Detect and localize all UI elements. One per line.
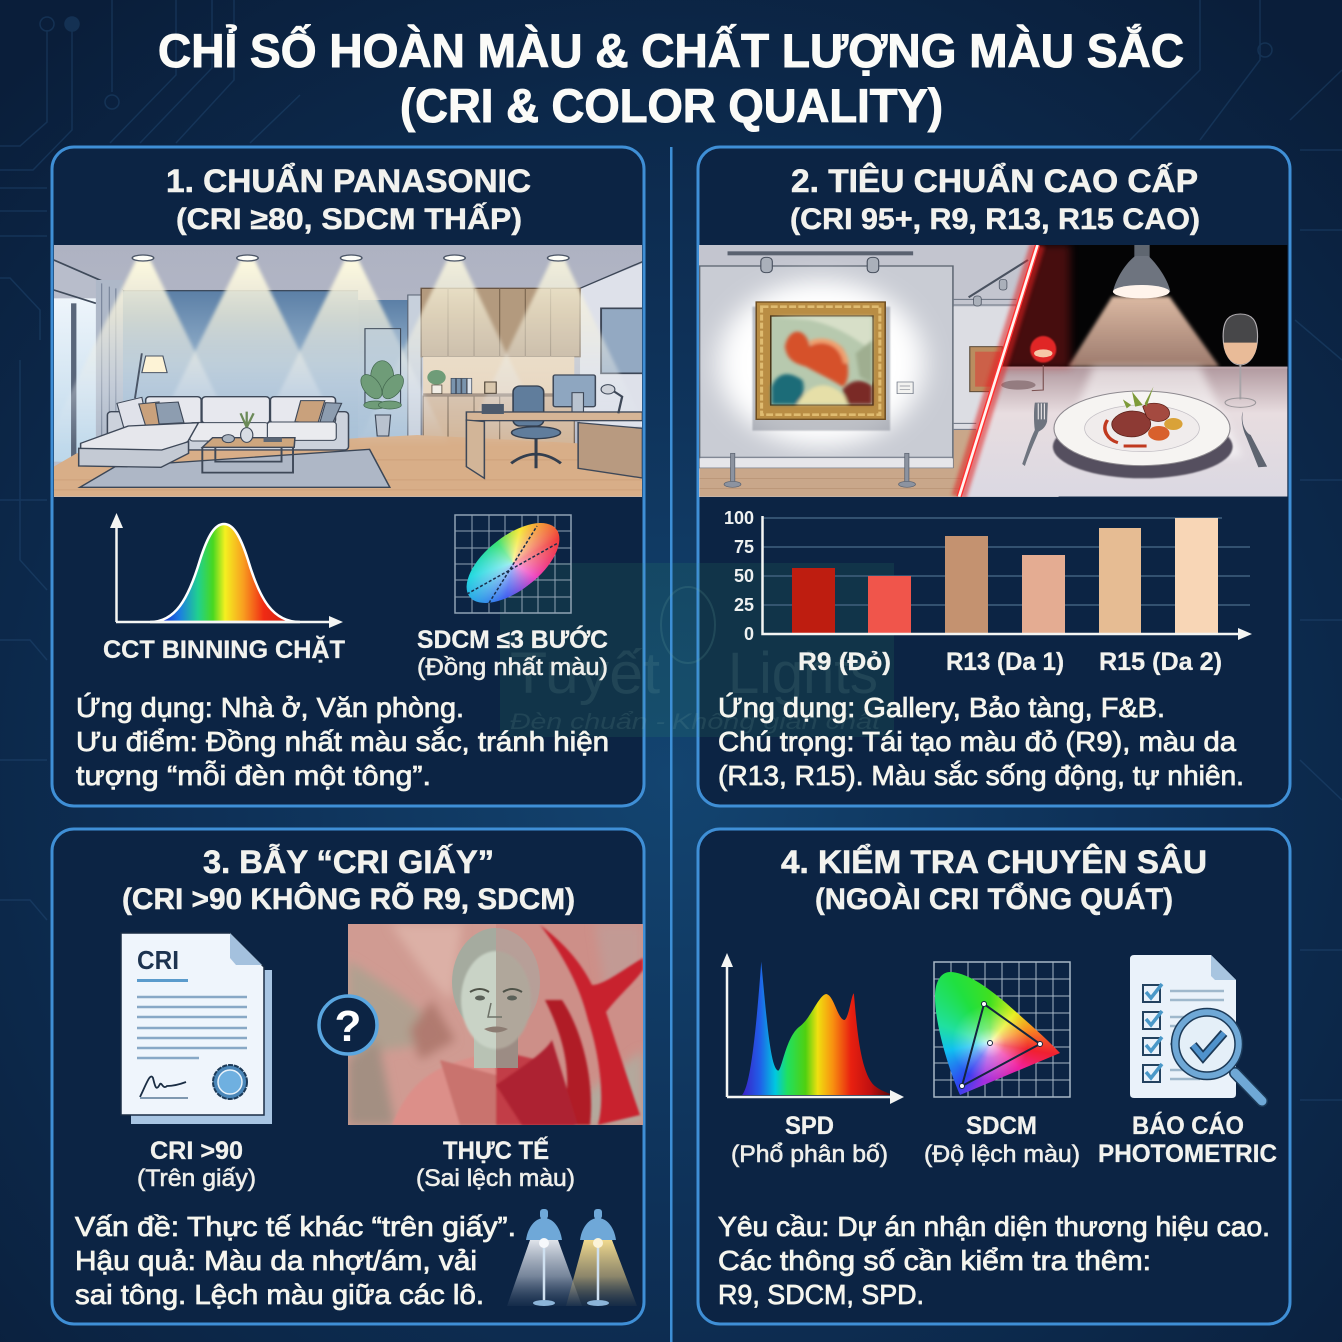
icon: two lamps with different tones	[507, 1209, 637, 1306]
watermark right part	[661, 563, 894, 737]
axes	[762, 516, 1242, 634]
panel 3 description: Hậu quả: Màu da nhợt/ám, vải	[75, 1245, 477, 1276]
watermark: gap between upper panels	[644, 563, 698, 737]
panel 1 description: Ứng dụng: Nhà ở, Văn phòng.	[76, 692, 464, 723]
icon: question mark circle: ?	[335, 1002, 361, 1051]
photo: model with color shift	[348, 924, 643, 1125]
label: SDCM	[924, 1112, 1080, 1168]
panel 1 description: tượng “mỗi đèn một tông”.	[76, 760, 431, 791]
watermark right part: Lights	[728, 641, 878, 706]
x axis labels	[798, 648, 1222, 676]
icon: question mark circle	[319, 996, 377, 1054]
chair	[513, 386, 544, 426]
panel 4 card	[698, 829, 1290, 1324]
plate	[1052, 436, 1234, 480]
dining side	[955, 240, 1300, 500]
panel 4 description: Yêu cầu: Dự án nhận diện thương hiệu cao.	[718, 1211, 1270, 1242]
panel 3 heading	[122, 844, 575, 916]
watermark left part: Tuyết	[510, 641, 660, 706]
red diagonal divider	[959, 245, 1038, 497]
panel 4 description	[718, 1211, 1270, 1310]
wine glass	[1223, 314, 1258, 365]
x axis labels: R15 (Da 2)	[1099, 648, 1222, 676]
downlights	[132, 255, 569, 261]
fork	[1022, 403, 1048, 466]
panel 4 description: Các thông số cần kiểm tra thêm:	[718, 1245, 1151, 1276]
center divider line	[670, 147, 672, 1342]
panel 3 heading: (CRI >90 KHÔNG RÕ R9, SDCM)	[122, 882, 575, 916]
bust and drapes	[392, 1050, 575, 1125]
candle / red lamp glow	[1030, 336, 1056, 363]
face	[452, 928, 496, 1049]
label: CCT binning: CCT BINNING CHẶT	[103, 635, 345, 664]
chart: CCT binning spectrum	[103, 513, 345, 664]
label: photometric report	[1098, 1111, 1277, 1168]
panel 3 description: sai tông. Lệch màu giữa các lô.	[75, 1279, 484, 1310]
panel 4 heading: (NGOÀI CRI TỔNG QUÁT)	[815, 882, 1173, 916]
x axis labels: R9 (Đỏ)	[798, 648, 891, 676]
label: CRI on paper: CRI >90	[150, 1137, 243, 1165]
y axis labels: 75	[734, 537, 754, 557]
panel 2 heading: (CRI 95+, R9, R13, R15 CAO)	[790, 203, 1200, 236]
gallery side	[695, 240, 1059, 507]
panel 3 description	[75, 1211, 516, 1310]
y axis labels: 100	[724, 508, 754, 528]
bar chart: R9 R13 R15	[724, 508, 1252, 676]
coffee table	[202, 438, 295, 447]
label: SDCM steps: (Đồng nhất màu)	[417, 654, 608, 681]
mirror panel	[365, 329, 401, 406]
panel 3 card	[52, 829, 644, 1324]
panel 2 card	[698, 147, 1290, 806]
label: photometric report: PHOTOMETRIC	[1098, 1140, 1277, 1168]
label: SPD: SPD	[785, 1112, 834, 1140]
x axis labels: R13 (Da 1)	[946, 648, 1064, 676]
knife	[1242, 412, 1267, 467]
chart: SDCM chromaticity diagram	[924, 962, 1080, 1168]
panel 2 description: Chú trọng: Tái tạo màu đỏ (R9), màu da	[718, 726, 1236, 757]
sofa	[107, 412, 349, 450]
panel 4: in-depth testing	[698, 829, 1290, 1324]
label: SDCM steps	[417, 624, 608, 681]
label: photometric report: BÁO CÁO	[1132, 1111, 1244, 1140]
label: SDCM steps: SDCM ≤3 BƯỚC	[417, 624, 608, 654]
panel 2 heading: 2. TIÊU CHUẨN CAO CẤP	[791, 163, 1198, 199]
y axis labels: 0	[744, 624, 754, 644]
watermark left part: Đèn chuẩn -	[510, 709, 665, 734]
y axis labels: 50	[734, 566, 754, 586]
panel 4 heading	[781, 844, 1207, 916]
chart: SPD spectrum	[721, 953, 904, 1168]
watermark left part	[500, 563, 665, 737]
title: (CRI & COLOR QUALITY)	[400, 79, 943, 132]
panel 2 description: (R13, R15). Màu sắc sống động, tự nhiên.	[718, 760, 1244, 791]
label: actual result: (Sai lệch màu)	[416, 1165, 575, 1192]
y axis labels: 25	[734, 595, 754, 615]
panel 3 heading: 3. BẪY “CRI GIẤY”	[203, 844, 494, 880]
icon: photometric report with magnifier	[1098, 955, 1277, 1168]
title: CHỈ SỐ HOÀN MÀU & CHẤT LƯỢNG MÀU SẮC	[158, 24, 1184, 77]
label: actual result: THỰC TẾ	[443, 1136, 549, 1165]
title	[158, 24, 1184, 132]
label: actual result	[416, 1136, 575, 1192]
panel 1 heading	[166, 163, 531, 236]
picture frame and painting	[752, 307, 890, 431]
panel 1: Panasonic standard	[44, 147, 665, 806]
label: SDCM: SDCM	[966, 1112, 1037, 1140]
icon: CRI certificate document: CRI	[137, 945, 179, 975]
panel 2: premium standard	[661, 147, 1300, 806]
panel 1 card	[52, 147, 644, 806]
label: SPD: (Phổ phân bố)	[731, 1141, 888, 1168]
pendant lamp	[1134, 245, 1150, 258]
panel 2 description: Ứng dụng: Gallery, Bảo tàng, F&B.	[718, 692, 1165, 723]
watermark right part: Không gian chất	[672, 709, 881, 734]
stanchions	[724, 453, 915, 487]
light beams	[71, 260, 622, 440]
icon: CRI certificate document	[121, 933, 272, 1124]
grid lines	[762, 518, 1250, 605]
illustration: gallery and fine dining split	[695, 240, 1300, 507]
floor lamp	[135, 353, 142, 398]
label: CRI on paper: (Trên giấy)	[137, 1165, 256, 1192]
panel 2 description	[718, 692, 1244, 791]
chart: SDCM color ellipse on grid	[417, 508, 608, 681]
plant	[375, 415, 391, 436]
illustration: living room and office with downlights	[44, 240, 655, 507]
label: CRI on paper	[137, 1137, 256, 1192]
panel 2 heading	[790, 163, 1200, 236]
y axis labels	[724, 508, 754, 644]
shelf items	[451, 378, 472, 394]
label: SPD	[731, 1112, 888, 1168]
panel 4 description: R9, SDCM, SPD.	[718, 1279, 924, 1310]
cabinets	[421, 288, 580, 357]
small red framed picture	[970, 347, 1002, 392]
panel 1 description: Ưu điểm: Đồng nhất màu sắc, tránh hiện	[76, 726, 609, 757]
label: SDCM: (Độ lệch màu)	[924, 1141, 1080, 1168]
panel 4 heading: 4. KIỂM TRA CHUYÊN SÂU	[781, 844, 1207, 880]
bars	[792, 518, 1218, 634]
floor	[54, 435, 642, 497]
panel 3: paper CRI trap	[52, 829, 644, 1324]
panel 1 heading: (CRI ≥80, SDCM THẤP)	[176, 202, 522, 236]
desk	[466, 412, 642, 421]
neck	[474, 1035, 496, 1068]
panel 1 description	[76, 692, 609, 791]
panel 1 heading: 1. CHUẨN PANASONIC	[166, 163, 531, 199]
monitor	[553, 375, 595, 407]
track lights	[728, 251, 913, 255]
panel 3 description: Vấn đề: Thực tế khác “trên giấy”.	[75, 1211, 516, 1242]
